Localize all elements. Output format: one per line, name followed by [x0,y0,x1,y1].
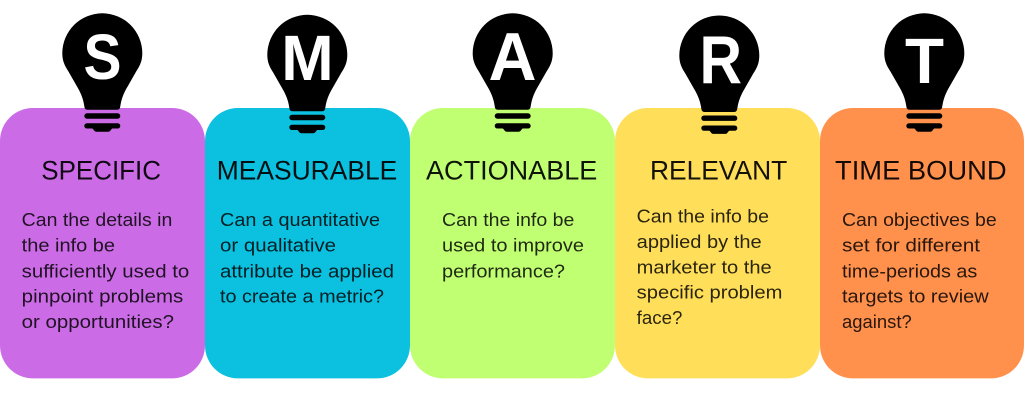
icon: light bulb M: M [281,22,334,94]
text block: specific question [22,210,189,332]
text block: specific question: or opportunities? [22,312,174,332]
icon: light bulb S: S [84,21,122,93]
text block: specific question: pinpoint problems [22,287,183,307]
text block: time bound question: targets to review [842,287,990,307]
heading: time bound: TIME BOUND [835,156,1007,186]
icon: light bulb T [884,13,964,132]
panel: relevant [615,108,820,378]
text block: measurable question [220,210,394,307]
icon: light bulb M [267,15,347,133]
text block: measurable question: attribute be applied [220,261,394,281]
text block: relevant question: marketer to the [637,257,772,277]
text block: specific question: sufficiently used to [22,261,189,281]
heading: measurable: MEASURABLE [217,156,397,186]
icon: light bulb R [679,16,759,134]
text block: measurable question: or qualitative [220,236,336,256]
text block: time bound question: Can objectives be [842,210,997,230]
text block: relevant question: applied by the [637,232,762,252]
text block: relevant question: face? [637,308,682,328]
icon: light bulb A [473,13,553,132]
icon: light bulb A: A [488,19,536,95]
text block: actionable question: performance? [442,261,565,281]
text block: measurable question: Can a quantitative [220,210,380,230]
heading: relevant: RELEVANT [650,156,787,186]
text block: specific question: Can the details in [22,210,172,230]
text block: relevant question: Can the info be [637,206,769,226]
text block: time bound question: time-periods as [842,261,977,281]
panel: actionable [410,108,615,378]
card: actionable background [410,108,615,378]
text block: time bound question [842,210,997,332]
text block: relevant question: specific problem [637,283,782,303]
heading: specific: SPECIFIC [41,156,161,186]
text block: time bound question: set for different [842,236,980,256]
text block: time bound question: against? [842,312,912,332]
card: specific background [0,108,205,378]
text block: actionable question: Can the info be [442,210,574,230]
panel: time bound [820,108,1024,378]
card: relevant background [615,108,820,378]
panel: measurable [205,108,410,378]
heading: actionable: ACTIONABLE [426,156,597,186]
panel: specific [0,108,205,378]
icon: light bulb R: R [700,22,742,98]
card: measurable background [205,108,410,378]
icon: light bulb S [62,13,142,132]
text block: actionable question [442,210,584,281]
text block: actionable question: used to improve [442,236,584,256]
text block: measurable question: to create a metric? [220,287,384,307]
text block: relevant question [637,206,782,328]
text block: specific question: the info be [22,236,115,256]
card: time bound background [820,108,1024,378]
icon: light bulb T: T [905,25,944,97]
